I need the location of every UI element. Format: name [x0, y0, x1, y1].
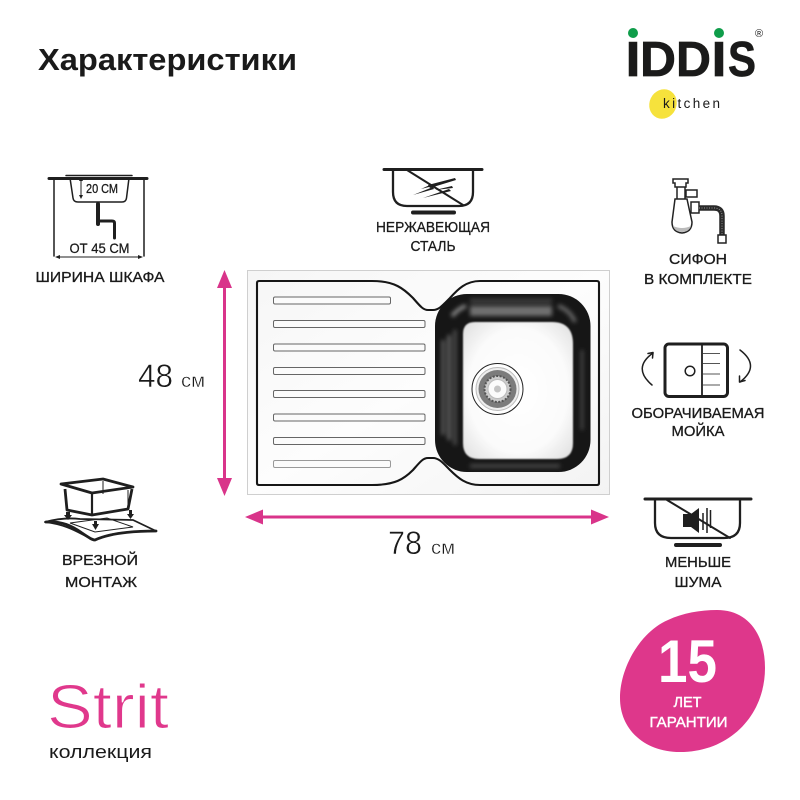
- feature: stainless steel: СТАЛЬ: [410, 238, 456, 255]
- icon: cabinet cross-section: [49, 176, 147, 259]
- feature: less noise: ШУМА: [674, 574, 722, 591]
- logo: IDDIS kitchen: I: [626, 33, 640, 87]
- feature: flush mount: [45, 479, 156, 591]
- badge number: 15: [658, 628, 717, 695]
- label: cabinet width: ШИРИНА ШКАФА: [36, 269, 164, 286]
- drain: [472, 364, 523, 414]
- label: siphon included: СИФОН: [669, 251, 727, 268]
- sink product image: [248, 270, 610, 494]
- feature: stainless steel: [376, 170, 490, 255]
- unit: 48 cm: см: [181, 371, 205, 392]
- feature: flush mount: МОНТАЖ: [65, 574, 137, 591]
- label: stainless steel: НЕРЖАВЕЮЩАЯ: [376, 219, 490, 236]
- icon: cabinet cross-section: ОТ 45 СМ: [70, 240, 130, 256]
- unit: 78 cm: см: [431, 538, 455, 559]
- label: flush mount: ВРЕЗНОЙ: [62, 551, 138, 569]
- badge shape: [620, 610, 765, 752]
- icon: reversible sink: [642, 344, 750, 396]
- icon: flush mount: [45, 479, 156, 540]
- bowl walls: [435, 294, 590, 472]
- collection caption: коллекция: [49, 742, 152, 762]
- feature: reversible sink: [632, 344, 764, 440]
- feature: reversible sink: МОЙКА: [672, 422, 724, 440]
- logo: IDDIS kitchen: S: [728, 33, 756, 87]
- arrow: width dimension: [245, 510, 609, 524]
- warranty badge: [620, 610, 765, 752]
- bowl floor: [463, 322, 573, 459]
- icon: cabinet cross-section: 20 СМ: [86, 182, 118, 196]
- icon: stainless steel bowl: [384, 170, 482, 212]
- badge text line 2: ГАРАНТИИ: [650, 715, 728, 731]
- logo: IDDIS kitchen: kitchen: [663, 96, 720, 111]
- label: less noise: МЕНЬШЕ: [665, 554, 731, 571]
- logo: IDDIS kitchen: I: [712, 33, 726, 87]
- label: reversible sink: ОБОРАЧИВАЕМАЯ: [632, 405, 764, 422]
- sink plate: [248, 270, 610, 494]
- feature: siphon included: В КОМПЛЕКТЕ: [644, 271, 752, 288]
- label: 78 cm: 78: [388, 525, 422, 561]
- feature: less noise: [645, 499, 751, 591]
- title: Характеристики: [38, 43, 297, 77]
- logo: IDDIS kitchen: D: [640, 33, 676, 87]
- logo: IDDIS kitchen: D: [676, 33, 711, 87]
- collection name: Strit: [47, 673, 169, 742]
- sink groove outline: [257, 281, 599, 485]
- logo: IDDIS kitchen: [626, 28, 763, 123]
- icon: siphon: [672, 179, 726, 243]
- badge text: ЛЕТ: [674, 695, 702, 711]
- logo: IDDIS kitchen: ®: [755, 28, 763, 40]
- feature: siphon included: [644, 179, 752, 288]
- drainboard slots: [274, 297, 425, 468]
- icon: less noise bowl: [645, 499, 751, 545]
- arrow: height dimension: [217, 270, 232, 496]
- feature: cabinet width: [36, 176, 164, 286]
- label: 48 cm: 48: [138, 358, 173, 394]
